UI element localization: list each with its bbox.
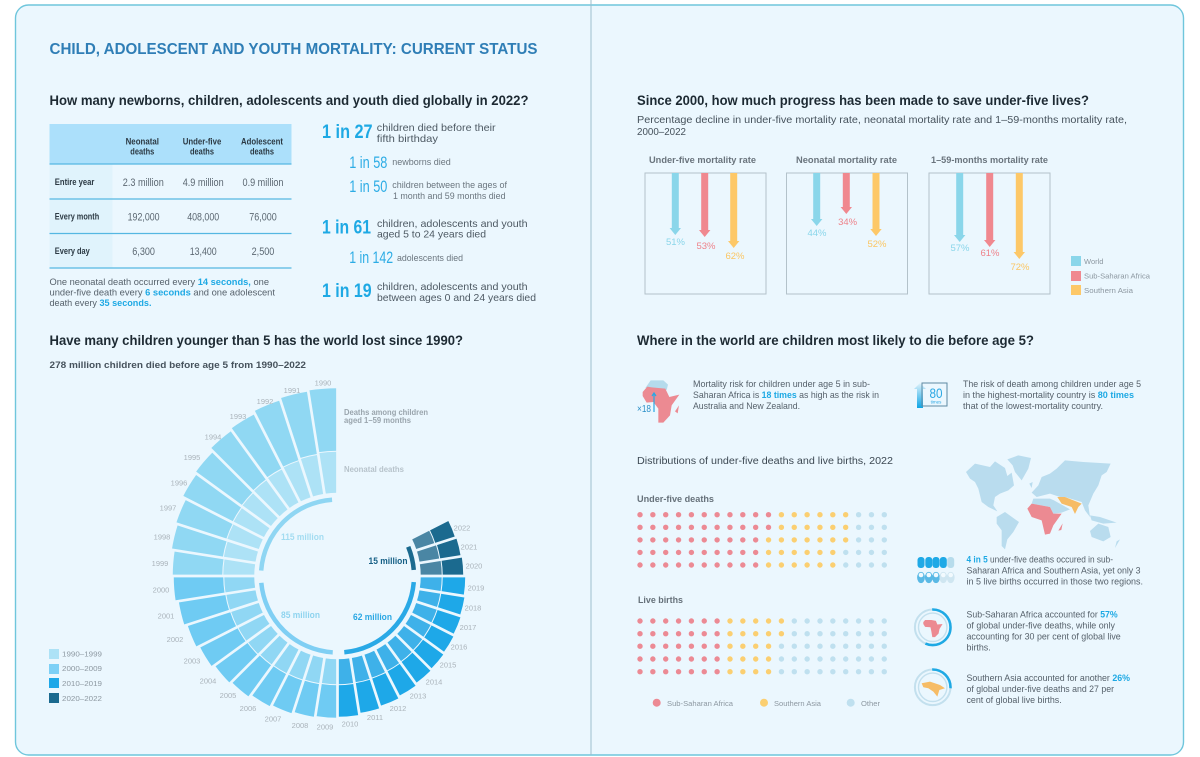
chart: neonatal mortality rate: Neonatal mortality rate xyxy=(796,155,897,165)
year labels: 2015 xyxy=(440,660,456,670)
icon: 80 times xyxy=(914,383,947,408)
text: 80 times: that of the lowest-mortality country. xyxy=(963,400,1103,411)
text: 4 in 5: Saharan Africa and Southern Asia, yet only 3 xyxy=(966,564,1140,576)
year labels: 2013 xyxy=(410,692,426,700)
legend: regions: World xyxy=(1084,257,1103,266)
table: deaths by period: Every day xyxy=(55,246,90,256)
year labels: 2005 xyxy=(220,691,236,700)
period totals xyxy=(281,532,408,623)
years 2020-2022 segments xyxy=(185,423,490,729)
text: Sub-Saharan Africa share: accounting for 30 per cent of global live xyxy=(966,630,1121,642)
year labels: 2004 xyxy=(200,676,216,686)
year labels: 2014 xyxy=(426,678,442,686)
year labels: 2022 xyxy=(454,524,470,532)
dot chart: live births: Live births xyxy=(638,595,683,606)
year labels: 1999 xyxy=(152,559,168,568)
text: 18 times: Mortality risk for children under age 5 in sub- xyxy=(693,378,870,389)
text: 4 in 5 xyxy=(966,554,1143,586)
stats: 1 in N: 1 in 142 xyxy=(349,248,393,267)
table: deaths by period: Under-five xyxy=(183,136,221,146)
year labels: 1994 xyxy=(205,432,221,442)
text: 80 times xyxy=(963,378,1141,411)
year labels: 2002 xyxy=(167,635,183,644)
legend: decades: 2000–2009 xyxy=(62,664,102,673)
year labels: 2012 xyxy=(390,704,406,713)
subheading: percentage decline xyxy=(637,115,1127,138)
legend: dot colours xyxy=(653,699,881,708)
chart: under-five mortality rate: 62% xyxy=(725,251,745,262)
year labels: 2010 xyxy=(342,720,358,728)
chart: neonatal mortality rate: 52% xyxy=(867,239,887,250)
subheading: percentage decline: Percentage decline in under-five mortality rate, neonatal mortality rate and 1–59-months mortality rate, xyxy=(637,115,1127,126)
stats: 1 in N: children, adolescents and youth xyxy=(377,218,528,230)
legend: dot colours: Other xyxy=(861,699,881,708)
year labels: 2017 xyxy=(460,623,476,632)
chart: under-five mortality rate: 51% xyxy=(666,237,686,248)
table: deaths by period: 2.3 million xyxy=(123,177,164,189)
table: deaths by period: Entire year xyxy=(55,177,95,187)
year labels: 2011 xyxy=(367,713,383,722)
chart: 1-59-months mortality rate: 72% xyxy=(1010,262,1030,273)
period totals: 85 million xyxy=(281,610,320,621)
text: 18 times xyxy=(693,378,879,411)
stats: 1 in N: children between the ages of xyxy=(392,180,507,190)
stats: 1 in N: 1 in 27 xyxy=(322,122,373,143)
table: deaths by period: deaths xyxy=(130,146,154,156)
table: deaths by period: 192,000 xyxy=(128,212,160,224)
note: time between deaths xyxy=(50,276,275,308)
chart: 1-59-months mortality rate: 61% xyxy=(980,248,1000,259)
year labels: 2000 xyxy=(153,586,169,594)
year labels: 2021 xyxy=(461,542,477,552)
period totals: 15 million xyxy=(368,556,408,567)
chart: 1-59-months mortality rate: 57% xyxy=(950,243,970,254)
legend: dot colours: Sub-Saharan Africa xyxy=(667,699,734,708)
stats: 1 in N: children died before their xyxy=(377,122,496,134)
heading: children lost since 1990: Have many children younger than 5 has the world lost since 1990? xyxy=(50,333,463,348)
text: 80 times: The risk of death among children under age 5 xyxy=(963,378,1141,389)
band labels xyxy=(344,408,428,474)
year labels: 1997 xyxy=(160,504,176,512)
band labels: aged 1–59 months xyxy=(344,416,412,425)
radial bar chart: deaths by year xyxy=(125,364,550,757)
icon: 4 in 5 people xyxy=(917,557,955,583)
year labels: 2008 xyxy=(292,721,308,730)
band labels: Neonatal deaths xyxy=(344,465,405,474)
period totals: 62 million xyxy=(353,612,392,623)
heading: distributions: Distributions of under-five deaths and live births, 2022 xyxy=(637,456,893,467)
stats: 1 in N: newborns died xyxy=(392,157,451,167)
table: deaths by period: Neonatal xyxy=(126,136,159,146)
year labels: 1990 xyxy=(315,378,331,388)
text: Southern Asia share: cent of global live births. xyxy=(966,694,1062,705)
table: deaths by period: 13,400 xyxy=(190,246,217,258)
table: deaths by period: 76,000 xyxy=(249,212,277,224)
legend: regions xyxy=(1071,256,1151,295)
year labels: 1991 xyxy=(284,386,300,395)
decade 2000-2009 segments xyxy=(151,389,524,757)
table: deaths by period: Every month xyxy=(55,212,99,222)
year labels: 2001 xyxy=(158,612,174,620)
stats: 1 in N: 1 in 19 xyxy=(322,281,372,302)
period totals: 115 million xyxy=(281,532,324,543)
chart: 1-59-months mortality rate xyxy=(929,155,1050,294)
table: deaths by period xyxy=(50,124,292,268)
chart: under-five mortality rate: 53% xyxy=(696,241,716,252)
year labels: 1995 xyxy=(184,453,200,462)
dot chart: under-five deaths xyxy=(637,494,884,565)
decade 1990-1999 segments xyxy=(125,364,550,757)
text: Southern Asia share: Southern Asia accounted for another 26% xyxy=(966,672,1131,683)
chart: under-five mortality rate xyxy=(645,155,766,294)
text: 18 times: Australia and New Zealand. xyxy=(693,400,800,411)
legend: decades xyxy=(49,649,102,703)
note: time between deaths: death every 35 seconds. xyxy=(50,297,152,308)
stats: 1 in N: fifth birthday xyxy=(377,133,439,145)
chart: 1-59-months mortality rate: 1–59-months mortality rate xyxy=(931,155,1048,165)
subheading: 278 million: 278 million children died before age 5 from 1990–2022 xyxy=(50,360,306,371)
stats: 1 in N xyxy=(322,122,536,304)
year labels: 1992 xyxy=(257,397,273,406)
table: deaths by period: 6,300 xyxy=(132,246,155,258)
table: deaths by period: deaths xyxy=(250,146,274,156)
legend: regions: Southern Asia xyxy=(1084,286,1134,295)
icon: Africa times 18: ×18 xyxy=(637,404,651,415)
decade 2010-2019 segments xyxy=(168,406,507,746)
chart: neonatal mortality rate: 44% xyxy=(807,228,827,239)
table: deaths by period: 408,000 xyxy=(187,212,219,224)
year labels: 1993 xyxy=(230,412,246,421)
stats: 1 in N: between ages 0 and 24 years died xyxy=(377,292,536,304)
text: Sub-Saharan Africa share: births. xyxy=(966,642,991,652)
stats: 1 in N: aged 5 to 24 years died xyxy=(377,228,486,240)
subheading: percentage decline: 2000–2022 xyxy=(637,127,686,138)
year labels: 2003 xyxy=(184,656,200,666)
note: time between deaths: One neonatal death occurred every 14 seconds, one xyxy=(50,276,269,287)
legend: decades: 2020–2022 xyxy=(62,694,102,703)
stats: 1 in N: adolescents died xyxy=(397,253,463,263)
year labels: 2018 xyxy=(465,604,481,612)
note: time between deaths: under-five death every 6 seconds and one adolescent xyxy=(50,286,275,298)
text: Sub-Saharan Africa share xyxy=(966,608,1121,652)
text: 4 in 5: in 5 live births occurred in those two regions. xyxy=(966,576,1143,586)
dot chart: under-five deaths: Under-five deaths xyxy=(637,494,714,505)
heading: progress since 2000: Since 2000, how much progress has been made to save under-five lives? xyxy=(637,93,1089,108)
icon: Africa times 18 xyxy=(637,380,679,423)
year labels: 2019 xyxy=(468,584,484,592)
icon: South Asia ring xyxy=(915,670,950,705)
year labels: 1996 xyxy=(171,478,187,488)
text: Southern Asia share: of global under-five deaths and 27 per xyxy=(966,683,1114,694)
text: 80 times: in the highest-mortality country is 80 times xyxy=(963,389,1134,400)
stats: 1 in N: 1 in 58 xyxy=(349,153,387,172)
chart: neonatal mortality rate: 34% xyxy=(838,217,858,228)
icon: Africa ring xyxy=(915,610,950,645)
table: deaths by period: 2,500 xyxy=(252,246,274,258)
year labels xyxy=(152,378,484,732)
year labels: 2020 xyxy=(466,562,482,570)
table: deaths by period: Adolescent xyxy=(241,136,283,146)
chart: under-five mortality rate: Under-five mortality rate xyxy=(649,155,756,165)
stats: 1 in N: 1 in 61 xyxy=(322,218,371,238)
legend: dot colours: Southern Asia xyxy=(774,699,822,708)
stats: 1 in N: 1 in 50 xyxy=(349,177,387,196)
table: deaths by period: 4.9 million xyxy=(183,177,224,189)
table: deaths by period: deaths xyxy=(190,146,214,156)
text: 18 times: Saharan Africa is 18 times as high as the risk in xyxy=(693,389,879,400)
band labels: Deaths among children xyxy=(344,408,428,417)
text: 4 in 5: 4 in 5 under-five deaths occured in sub- xyxy=(966,554,1113,564)
year labels: 1998 xyxy=(154,532,170,542)
legend: decades: 2010–2019 xyxy=(62,679,102,688)
stats: 1 in N: children, adolescents and youth xyxy=(377,281,528,293)
legend: regions: Sub-Saharan Africa xyxy=(1084,272,1151,280)
heading: where in the world: Where in the world are children most likely to die before age 5? xyxy=(637,333,1034,348)
title: CHILD, ADOLESCENT AND YOUTH MORTALITY: CURRENT STATUS xyxy=(50,41,538,58)
text: Southern Asia share xyxy=(966,672,1131,705)
year labels: 2016 xyxy=(451,642,467,652)
text: Sub-Saharan Africa share: Sub-Saharan Africa accounted for 57% xyxy=(966,608,1118,620)
year labels: 2006 xyxy=(240,704,256,713)
map: world xyxy=(966,455,1120,549)
icon: 80 times: times xyxy=(931,400,942,404)
table: deaths by period: 0.9 million xyxy=(242,177,284,189)
stats: 1 in N: 1 month and 59 months died xyxy=(393,191,506,201)
year labels: 2009 xyxy=(317,722,333,732)
chart: neonatal mortality rate xyxy=(786,155,908,294)
heading: deaths in 2022: How many newborns, children, adolescents and youth died globally in 2022? xyxy=(50,93,528,108)
dot chart: live births xyxy=(638,595,884,672)
icon: 80 times: 80 xyxy=(930,385,943,401)
text: Sub-Saharan Africa share: of global under-five deaths, while only xyxy=(966,620,1115,630)
year labels: 2007 xyxy=(265,714,281,724)
legend: decades: 1990–1999 xyxy=(62,650,102,658)
period arcs xyxy=(238,476,437,676)
